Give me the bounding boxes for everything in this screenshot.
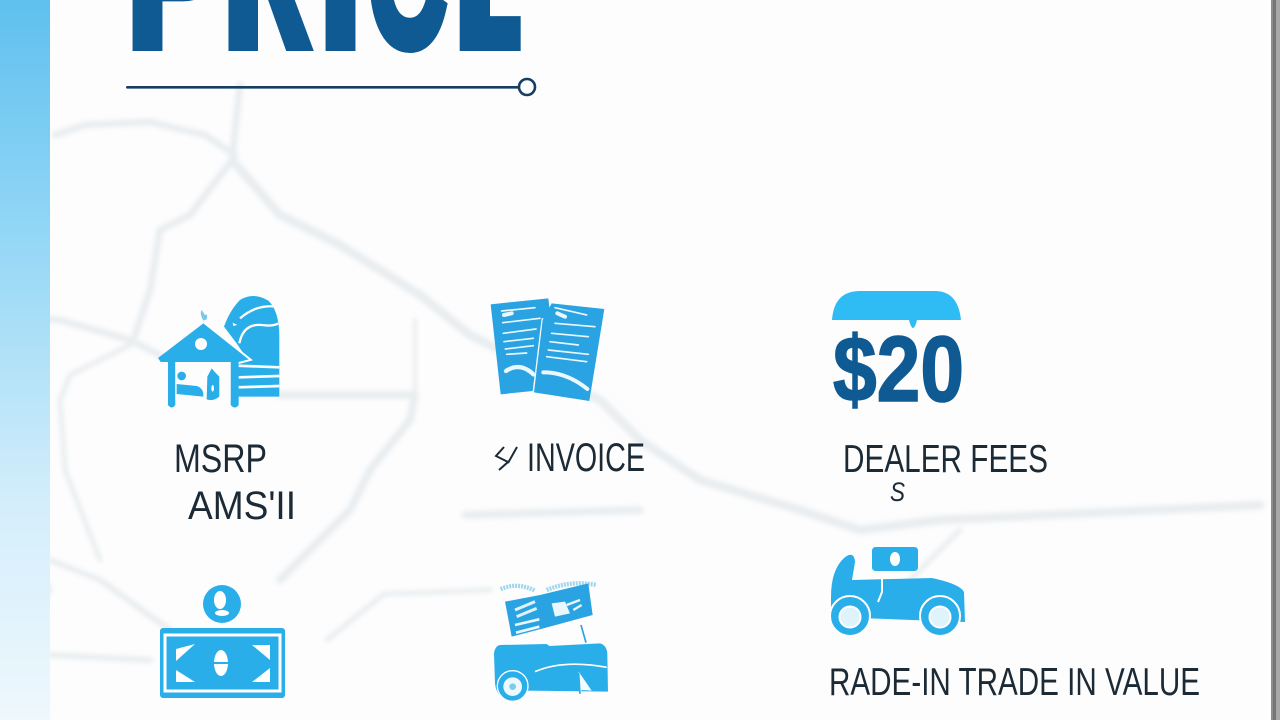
panel: cash xyxy=(160,585,285,698)
icon: two documents xyxy=(491,298,604,401)
icon: price tag cap xyxy=(832,291,961,328)
icon: house and sacks xyxy=(158,296,279,407)
title: PRICE (cropped by top edge) xyxy=(127,0,522,90)
label: DEALER FEES: DEALER FEES xyxy=(843,438,1048,481)
label: S: S xyxy=(890,477,905,507)
glyph mark before invoice label xyxy=(496,447,517,470)
panel: dealer fees xyxy=(832,291,1048,507)
label: INVOICE: INVOICE xyxy=(527,436,645,480)
icon: car with ticket xyxy=(494,583,608,701)
panel: financing xyxy=(494,583,608,701)
panel: invoice xyxy=(491,298,645,480)
icon: banknote xyxy=(160,628,285,698)
figure: $20: $20 xyxy=(833,317,964,421)
icon: coin xyxy=(203,585,241,623)
panel: trade-in xyxy=(829,547,1200,704)
panel: MSRP xyxy=(158,296,296,528)
label: MSRP: MSRP xyxy=(174,437,267,481)
right edge bar xyxy=(1271,0,1280,720)
left gradient band xyxy=(0,0,50,720)
title underline with ring end xyxy=(126,79,535,95)
icon: truck with tag xyxy=(830,547,965,636)
label: AMS'II: AMS'II xyxy=(188,484,296,528)
